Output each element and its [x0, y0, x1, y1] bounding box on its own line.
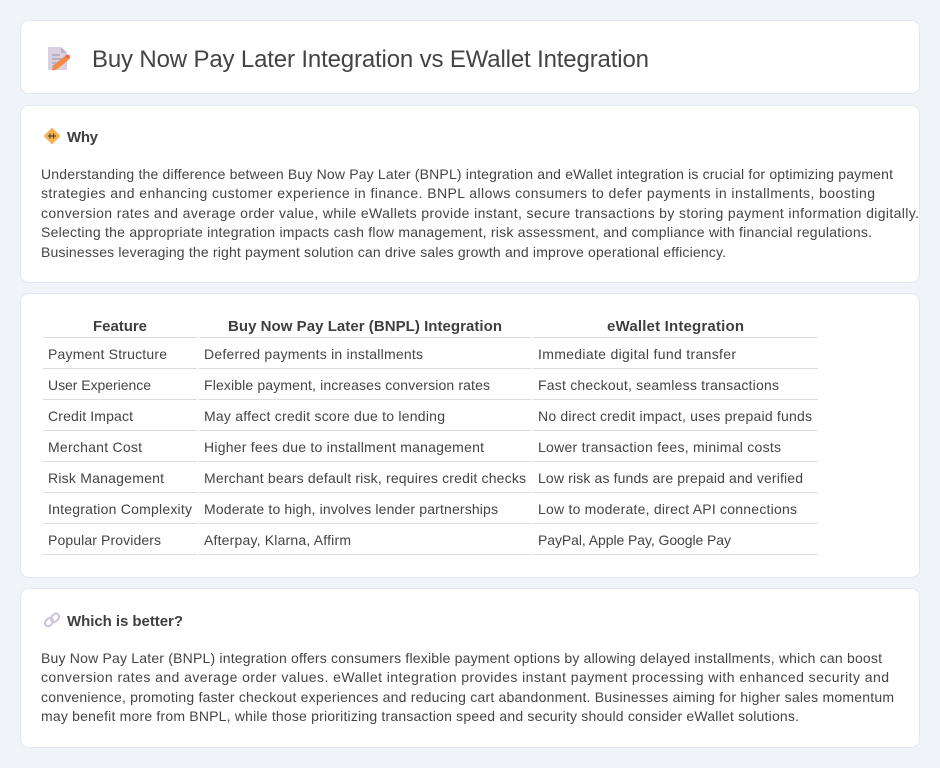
- panel: why: [20, 106, 920, 282]
- text block: which is better: conversion rates and average order values. eWallet integration provides instant payment processing with enhanced security and: [41, 669, 889, 685]
- panel: comparison table: [20, 294, 920, 578]
- row: user experience: Flexible payment, increases conversion rates: [204, 377, 490, 393]
- text block: which is better: convenience, promoting faster checkout experiences and reducing cart abandonment. Businesses aiming for higher sales momentum: [41, 689, 894, 705]
- row: credit impact: No direct credit impact, uses prepaid funds: [538, 408, 812, 424]
- row: integration complexity: Moderate to high, involves lender partnerships: [204, 501, 498, 517]
- table header: Feature: [93, 318, 147, 335]
- row: integration complexity: Integration Complexity: [48, 501, 192, 517]
- row: risk management: Low risk as funds are prepaid and verified: [538, 470, 803, 486]
- row: risk management: Merchant bears default risk, requires credit checks: [204, 470, 526, 486]
- row: popular providers: Afterpay, Klarna, Affirm: [204, 532, 351, 548]
- icon: document with pencil: [48, 47, 70, 70]
- table header: eWallet Integration: [607, 318, 744, 335]
- row: user experience: Fast checkout, seamless transactions: [538, 377, 779, 393]
- row: merchant cost: Merchant Cost: [48, 439, 142, 455]
- title: Buy Now Pay Later Integration vs EWallet Integration: [92, 46, 649, 73]
- row: popular providers: [48, 532, 731, 548]
- row: payment structure: [48, 346, 736, 362]
- text block: why: conversion rates and average order value, while eWallets provide instant, secure transactions by storing payment information digitally.: [41, 205, 919, 221]
- row: integration complexity: [48, 501, 797, 517]
- text block: which is better: may benefit more from BNPL, while those prioritizing transaction speed and security should consider eWallet solutions.: [41, 708, 799, 724]
- table header: [93, 318, 744, 335]
- row: user experience: [48, 377, 779, 393]
- row: risk management: [48, 470, 803, 486]
- table rules: [43, 338, 818, 554]
- text block: which is better: [41, 650, 894, 724]
- text block: why: Understanding the difference between Buy Now Pay Later (BNPL) integration and eWallet integration is crucial for optimizing payment: [41, 166, 893, 182]
- icon: warning diamond: [45, 129, 59, 143]
- text block: which is better: Buy Now Pay Later (BNPL) integration offers consumers flexible payment options by allowing delayed installments, which can boost: [41, 650, 882, 666]
- text block: why: Selecting the appropriate integration impacts cash flow management, risk assessment, and compliance with financial regulations.: [41, 224, 872, 240]
- row: risk management: Risk Management: [48, 470, 164, 486]
- row: credit impact: May affect credit score due to lending: [204, 408, 445, 424]
- row: credit impact: [48, 408, 812, 424]
- table header: Buy Now Pay Later (BNPL) Integration: [228, 318, 502, 335]
- icon: link: [44, 612, 60, 628]
- text block: why: [41, 166, 919, 260]
- text block: why: strategies and enhancing customer experience in finance. BNPL allows consumers to defer payments in installments, boosting: [41, 185, 875, 201]
- row: payment structure: Deferred payments in installments: [204, 346, 423, 362]
- panel: which is better: [20, 588, 920, 748]
- row: merchant cost: [48, 439, 781, 455]
- row: merchant cost: Higher fees due to installment management: [204, 439, 484, 455]
- row: merchant cost: Lower transaction fees, minimal costs: [538, 439, 781, 455]
- row: integration complexity: Low to moderate, direct API connections: [538, 501, 797, 517]
- heading: which is better: Which is better?: [67, 613, 183, 630]
- row: payment structure: Payment Structure: [48, 346, 167, 362]
- row: popular providers: PayPal, Apple Pay, Google Pay: [538, 532, 731, 548]
- panel: header: [20, 20, 920, 94]
- text block: why: Businesses leveraging the right payment solution can drive sales growth and improve operational efficiency.: [41, 244, 726, 260]
- heading: why: Why: [67, 129, 99, 146]
- row: user experience: User Experience: [48, 377, 151, 393]
- row: payment structure: Immediate digital fund transfer: [538, 346, 736, 362]
- row: popular providers: Popular Providers: [48, 532, 161, 548]
- row: credit impact: Credit Impact: [48, 408, 133, 424]
